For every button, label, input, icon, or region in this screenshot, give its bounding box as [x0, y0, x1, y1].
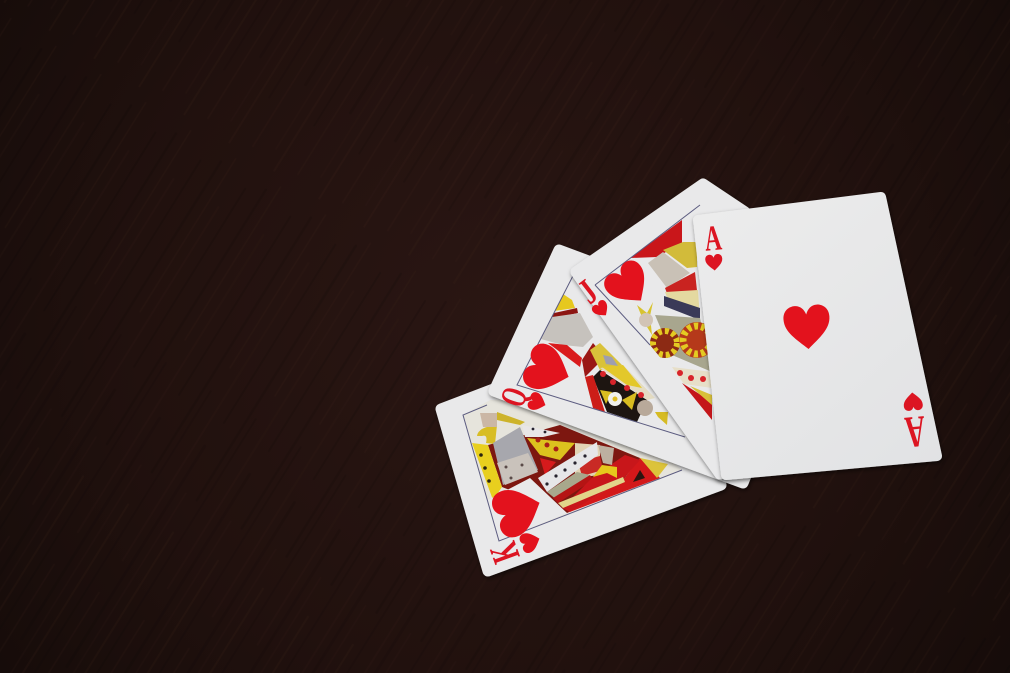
queen index heart [526, 391, 549, 414]
king index letter: K [482, 536, 529, 568]
ace centre heart [783, 304, 832, 351]
card: ace of hearts [698, 197, 937, 475]
card: queen of hearts [493, 250, 800, 483]
jack artwork [631, 220, 712, 420]
queen artwork [541, 294, 668, 425]
ace bottom index heart [903, 392, 923, 411]
jack index letter: J [570, 272, 605, 311]
jack index heart [590, 298, 612, 320]
ace top index heart [705, 254, 723, 271]
king large heart [488, 480, 548, 541]
card: king of hearts [436, 384, 728, 578]
king index heart [518, 529, 543, 554]
ace top index letter: A [703, 217, 723, 259]
queen index letter: Q [493, 382, 536, 412]
card: jack of hearts [568, 178, 750, 484]
king artwork [464, 400, 681, 528]
ace bottom index letter: A [903, 405, 927, 456]
queen large heart [520, 340, 576, 398]
jack large heart [600, 256, 657, 313]
